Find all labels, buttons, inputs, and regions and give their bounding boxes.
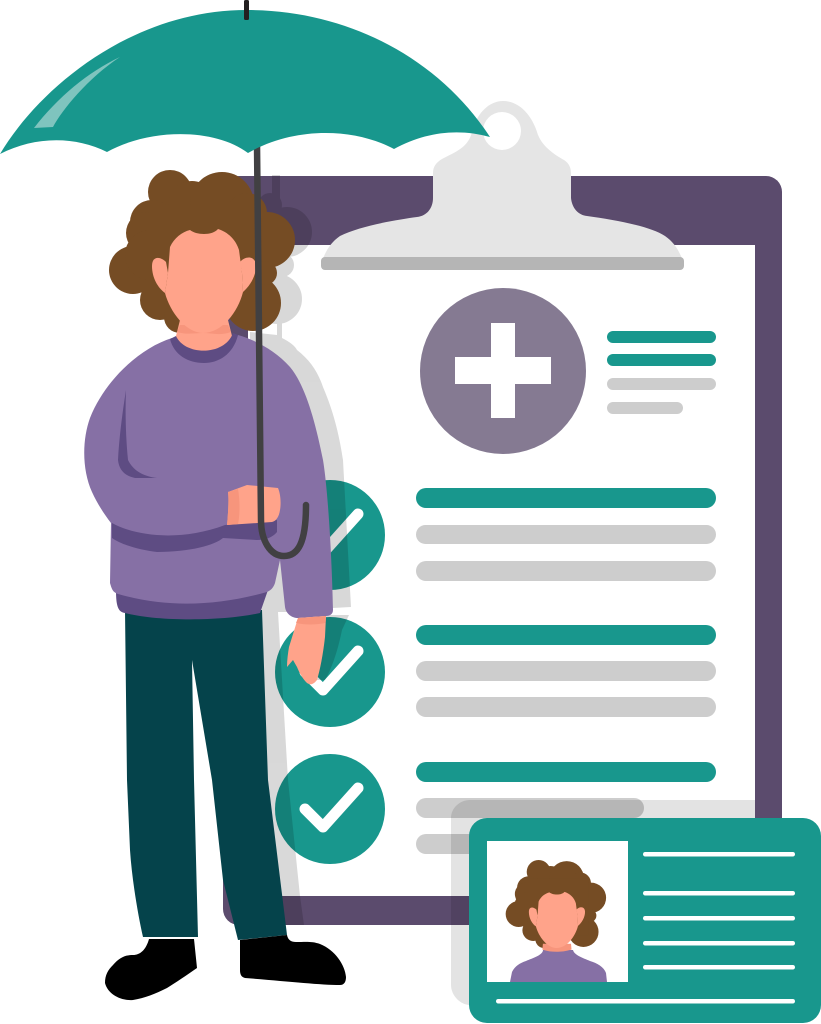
clip	[321, 101, 684, 270]
leg: pants	[125, 610, 287, 940]
header text lines	[607, 331, 716, 414]
umbrella canopy	[0, 10, 490, 154]
sleeve fold	[118, 390, 157, 478]
checklist row 3	[275, 754, 716, 864]
hair	[109, 170, 295, 333]
sleeve	[238, 335, 333, 618]
person shadow	[250, 175, 351, 925]
id card shadow	[451, 800, 755, 1005]
sweater collar	[170, 333, 238, 363]
hanging hand	[287, 616, 326, 684]
checklist row 2	[275, 617, 716, 727]
umbrella tip	[244, 0, 249, 20]
umbrella shaft and hook	[257, 145, 306, 556]
shoe: left	[105, 939, 197, 1000]
arm hand	[227, 485, 281, 525]
icon: medical cross badge	[420, 288, 586, 454]
umbrella highlight	[34, 57, 120, 128]
id card text lines	[496, 852, 795, 1004]
person	[84, 170, 346, 1000]
neck	[176, 320, 232, 356]
sweater body	[84, 335, 300, 604]
umbrella	[0, 0, 490, 556]
clipboard	[223, 101, 782, 925]
checklist row 1	[275, 480, 716, 590]
id card	[469, 818, 821, 1023]
sweater hem	[116, 590, 268, 619]
paper sheet	[248, 245, 755, 896]
clipboard board	[223, 176, 782, 925]
id photo	[487, 841, 628, 982]
shoe: right	[240, 935, 346, 985]
ears	[152, 258, 168, 293]
face	[165, 229, 243, 333]
waist fold	[112, 520, 277, 552]
